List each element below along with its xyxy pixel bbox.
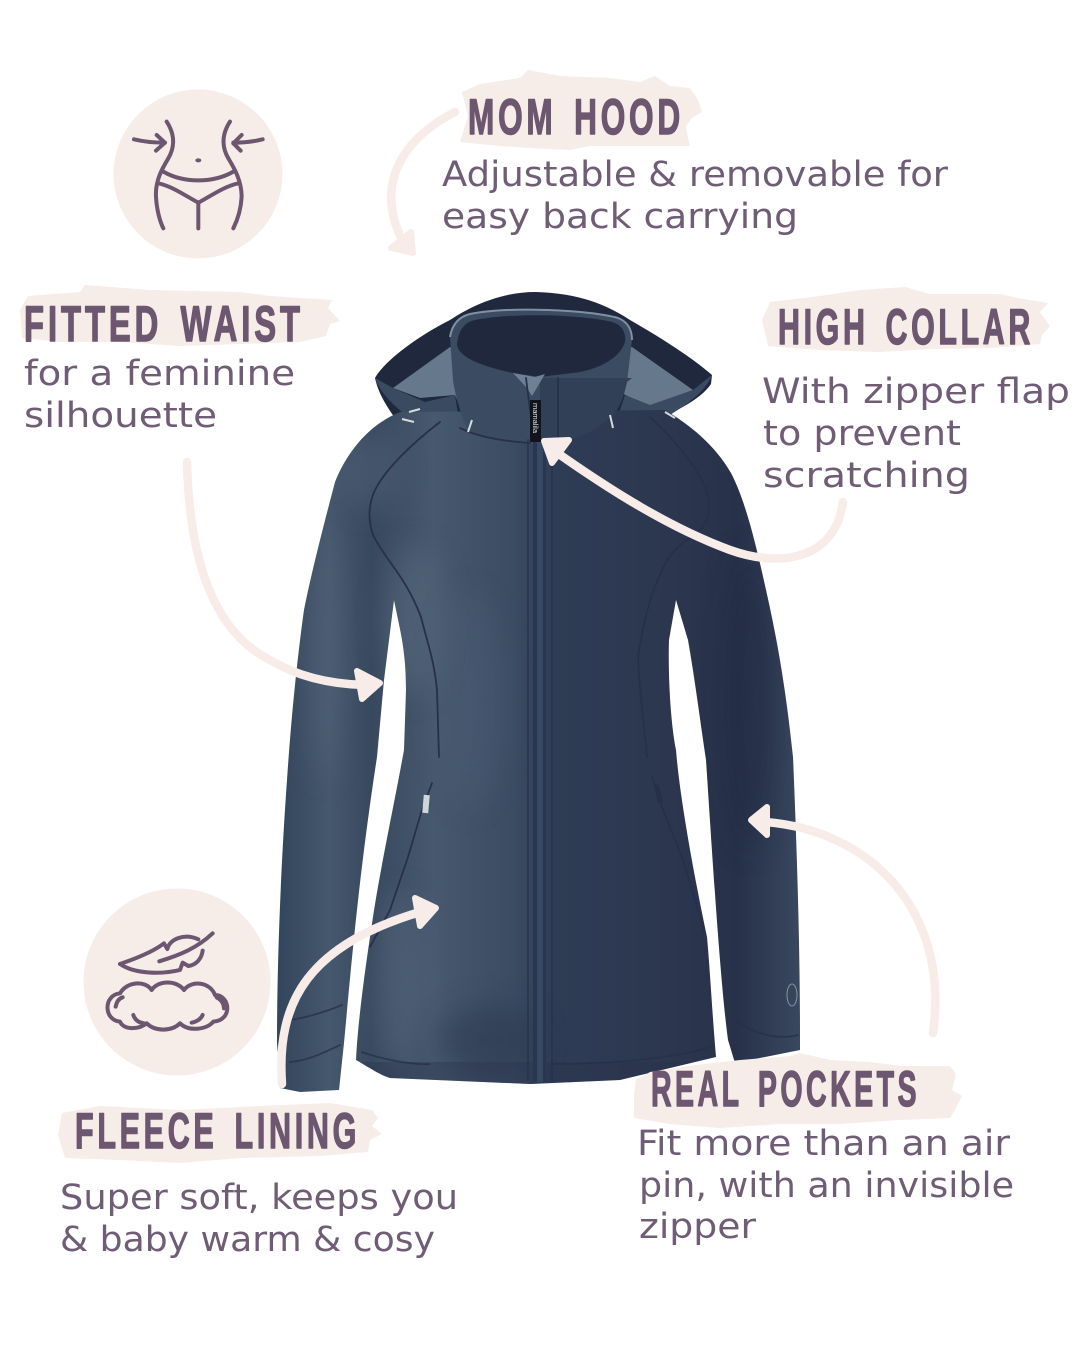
jacket hood shell: [375, 292, 712, 425]
description: Fit more than an air: [637, 1124, 1011, 1164]
description: [60, 1178, 458, 1260]
icon: feather and cloud: [84, 888, 270, 1076]
heading: MOM HOOD: [468, 89, 684, 145]
description: easy back carrying: [442, 197, 798, 237]
hem stitching: [290, 1005, 798, 1064]
fabric shading: [309, 430, 776, 1092]
callout: fleece lining: [58, 888, 458, 1260]
heading: FLEECE LINING: [75, 1103, 360, 1159]
icon: waist: [114, 90, 282, 258]
description: Super soft, keeps you: [60, 1178, 458, 1218]
description: for a feminine: [24, 354, 295, 394]
description: Adjustable & removable for: [442, 155, 949, 195]
callout: fitted waist: [20, 90, 380, 699]
description: silhouette: [24, 396, 217, 436]
seams: [369, 417, 709, 757]
arrow: to hood: [391, 112, 455, 253]
hood lining: [393, 347, 693, 430]
collar inner: [457, 315, 625, 377]
description: zipper: [639, 1207, 757, 1247]
description: [637, 1124, 1014, 1247]
zipper: [533, 440, 546, 1082]
jacket photo: [277, 292, 800, 1092]
callout: high collar: [544, 287, 1070, 559]
callout: mom hood: [391, 70, 949, 253]
arrow: to pocket area: [751, 807, 935, 1033]
jacket body and sleeves: [277, 410, 800, 1092]
brand label: mamalila: [531, 403, 540, 434]
sleeve logo: [787, 984, 797, 1006]
description: scratching: [763, 456, 970, 496]
arrow: to waist: [187, 462, 380, 699]
brush highlight: [634, 1053, 962, 1128]
callout: real pockets: [634, 807, 1014, 1247]
arrow: to collar: [544, 440, 843, 559]
description: With zipper flap: [762, 372, 1070, 412]
hood rim: [375, 375, 712, 432]
arrow: to lining: [281, 898, 436, 1084]
brush highlight: [460, 70, 702, 150]
hood cord toggles: [402, 409, 675, 432]
description: & baby warm & cosy: [60, 1220, 435, 1260]
collar: [450, 310, 632, 445]
brush highlight: [20, 285, 340, 346]
description: to prevent: [763, 414, 961, 454]
description: [442, 155, 949, 237]
brush highlight: [762, 287, 1050, 352]
pocket zips: [370, 777, 704, 947]
description: [24, 354, 295, 436]
brush highlight: [58, 1103, 382, 1163]
brand label: [530, 400, 541, 442]
description: pin, with an invisible: [639, 1166, 1014, 1206]
description: [762, 372, 1070, 496]
heading: FITTED WAIST: [24, 296, 304, 352]
